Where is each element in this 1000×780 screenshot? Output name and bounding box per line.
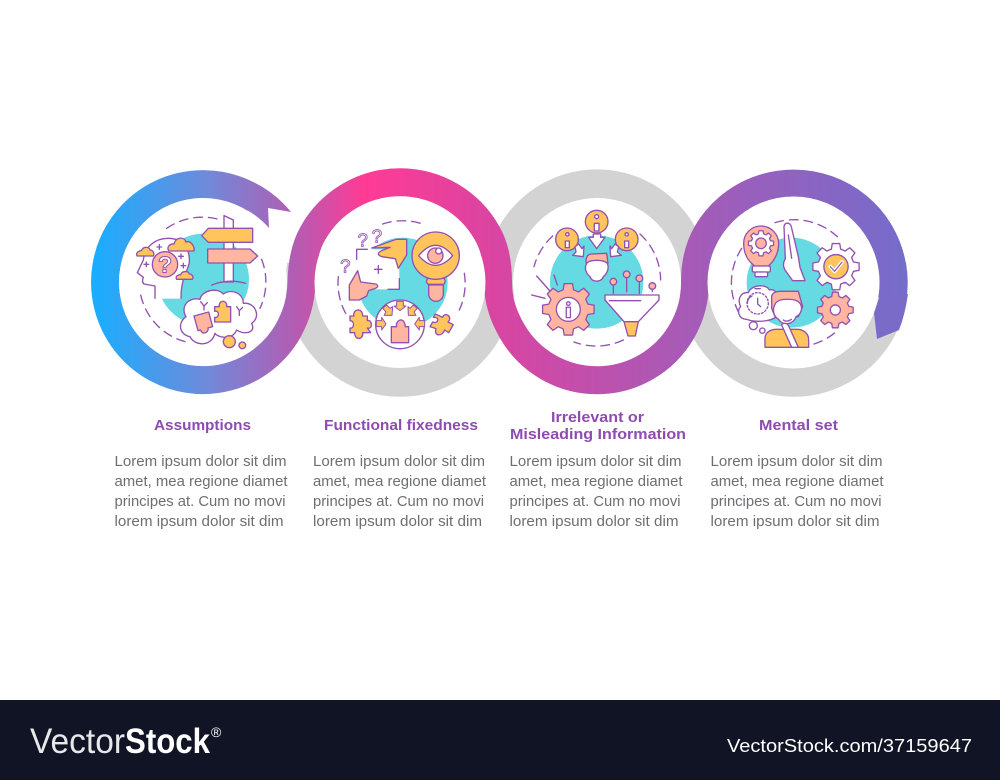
icon: mental set (731, 220, 859, 347)
text block: column 1 (114, 453, 288, 530)
teal blob (358, 238, 448, 328)
thought cloud with clock (739, 286, 777, 321)
puzzle left (350, 310, 371, 338)
footer logo: Vector (30, 722, 125, 761)
head (137, 238, 189, 298)
question marks (340, 226, 382, 277)
question marks: ? (357, 230, 368, 251)
text block: column 3 (510, 453, 683, 530)
text block: column 2 (313, 453, 487, 530)
dashed ring (534, 234, 661, 346)
title: irrelevant or misleading information: Misleading Information (510, 426, 686, 443)
bubbles (223, 336, 235, 348)
text block: column 4: amet, mea regione diamet (710, 473, 884, 490)
signpost (224, 216, 233, 282)
white circle discs (119, 196, 880, 368)
text block: column 2: principes at. Cum no movi (313, 493, 484, 510)
text block: column 3: lorem ipsum dolor sit dim (510, 513, 678, 530)
text block: column 2: amet, mea regione diamet (313, 473, 487, 490)
arrows (573, 234, 621, 257)
title: irrelevant or misleading information (510, 409, 686, 443)
text block: column 1: amet, mea regione diamet (114, 473, 288, 490)
text block: column 3: Lorem ipsum dolor sit dim (510, 453, 682, 470)
text block: column 1: Lorem ipsum dolor sit dim (114, 453, 286, 470)
magnifier (429, 285, 443, 301)
footer logo: Stock (125, 722, 210, 761)
thought cloud (180, 290, 257, 344)
title: assumptions: Assumptions (154, 417, 251, 434)
dashed ring (338, 221, 465, 314)
title: mental set: Mental set (759, 417, 838, 434)
teal blob (158, 234, 249, 325)
gear (543, 284, 594, 335)
ribbon swallowtail start (245, 185, 291, 228)
question circle (152, 252, 178, 277)
text block: column 4 (710, 453, 884, 530)
puzzle right (430, 314, 453, 335)
text block: column 2: lorem ipsum dolor sit dim (313, 513, 482, 530)
text block: column 1: principes at. Cum no movi (114, 493, 286, 510)
text block: column 4: principes at. Cum no movi (710, 493, 882, 510)
question marks: ? (372, 226, 382, 247)
rays (532, 275, 557, 298)
text block: column 4: Lorem ipsum dolor sit dim (710, 453, 882, 470)
teal blob (550, 235, 643, 329)
gradient ribbon (105, 182, 894, 380)
target circle (376, 300, 424, 349)
text block: column 4: lorem ipsum dolor sit dim (710, 513, 880, 530)
bulb (744, 226, 779, 266)
title: irrelevant or misleading information: Irrelevant or (551, 409, 644, 426)
teal blob (747, 238, 837, 328)
info circles (556, 210, 638, 251)
footer logo (30, 722, 222, 761)
icon: irrelevant or misleading information (532, 210, 661, 346)
white frame (357, 249, 399, 289)
icon: assumptions: ? (158, 252, 172, 278)
sparkles (144, 245, 186, 268)
clouds (168, 238, 194, 251)
bubbles (749, 322, 757, 330)
text block: column 3: principes at. Cum no movi (510, 493, 680, 510)
hand (784, 223, 805, 281)
hand: bottom left (349, 271, 378, 300)
text block: column 1: lorem ipsum dolor sit dim (114, 513, 284, 530)
dashed ring (141, 217, 266, 342)
footer id: VectorStock.com/37159647 (727, 735, 972, 756)
footer logo: ® (211, 724, 222, 740)
text block: column 3: amet, mea regione diamet (510, 473, 683, 490)
check gear (813, 244, 859, 290)
footer bar (0, 700, 1000, 780)
text block: column 2: Lorem ipsum dolor sit dim (313, 453, 485, 470)
grey ring track (300, 184, 894, 382)
icon: assumptions (137, 216, 266, 349)
head (586, 253, 608, 267)
puzzle pieces (215, 301, 231, 322)
title: functional fixedness: Functional fixedness (324, 417, 478, 434)
salmon gear (818, 292, 853, 328)
icon: functional fixedness (338, 221, 465, 349)
funnel (605, 295, 659, 322)
pins (610, 271, 656, 293)
hand: top right (372, 239, 407, 268)
person (765, 291, 809, 347)
question marks: ? (340, 256, 351, 277)
ribbon end patch (874, 294, 908, 339)
dashed ring (731, 220, 837, 344)
